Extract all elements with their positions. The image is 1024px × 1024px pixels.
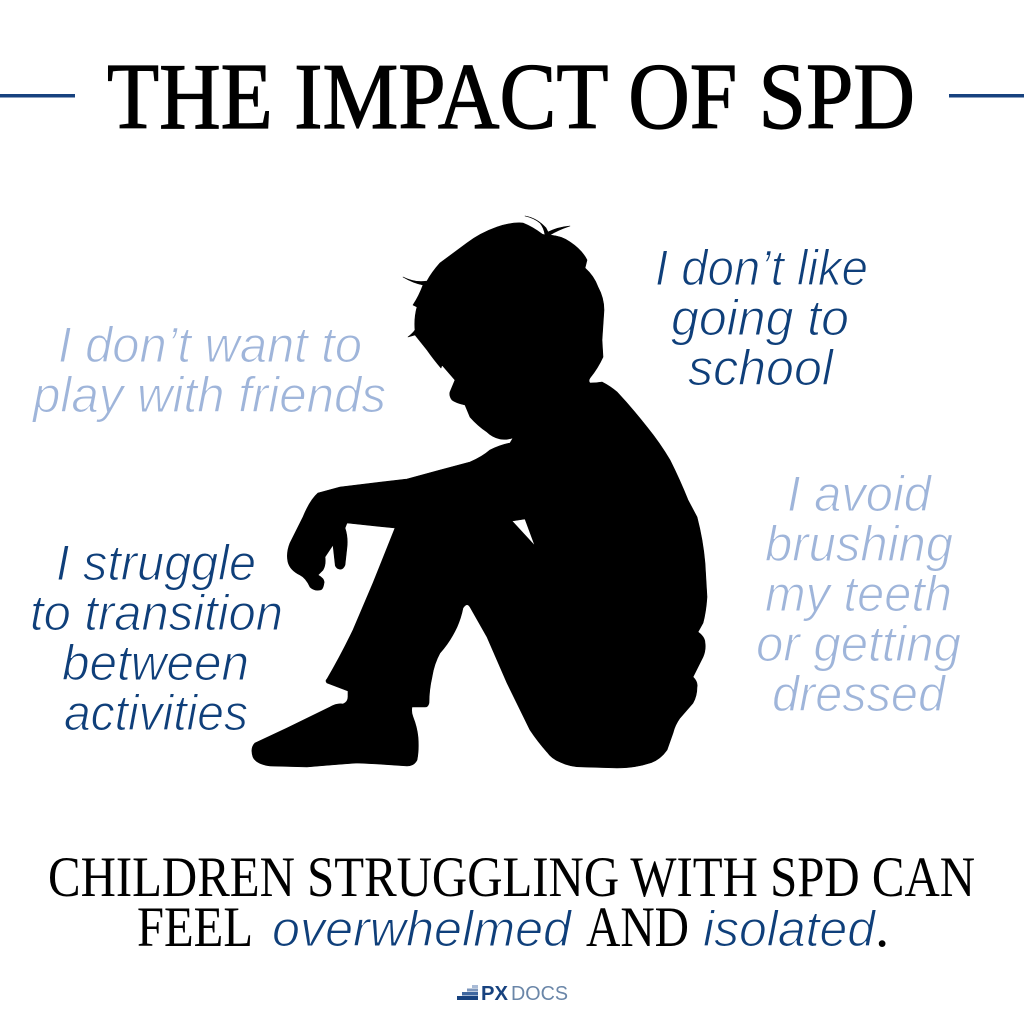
bottom statement: .: [875, 896, 889, 959]
quote: transitions: [30, 535, 283, 741]
quote: play with friends: play with friends: [31, 367, 386, 423]
quote: play with friends: I don’t want to: [58, 317, 362, 373]
title with side rules: THE IMPACT OF SPD: [107, 45, 915, 149]
quote: play with friends: [31, 317, 386, 423]
silhouette: child sitting with head down: [252, 216, 707, 768]
quote: brushing teeth or getting dressed: my teeth: [765, 566, 952, 622]
quote: transitions: I struggle: [56, 535, 256, 591]
quote: brushing teeth or getting dressed: I avoid: [787, 466, 933, 522]
bottom statement: overwhelmed: [272, 901, 573, 957]
logo: PX Docs: PX: [481, 983, 509, 1005]
bottom statement: FEEL: [137, 896, 253, 959]
quote: brushing teeth or getting dressed: brushing: [765, 516, 953, 572]
logo: PX Docs: [457, 983, 568, 1005]
quote: brushing teeth or getting dressed: dressed: [772, 666, 947, 722]
bottom statement: isolated: [703, 901, 877, 957]
bottom statement: [48, 846, 975, 959]
logo: PX Docs: DOCS: [511, 983, 568, 1005]
quote: transitions: between: [62, 635, 249, 691]
quote: going to school: going to: [671, 290, 849, 346]
bottom statement: AND: [586, 896, 689, 959]
quote: brushing teeth or getting dressed: or getting: [756, 616, 961, 672]
quote: going to school: I don’t like: [655, 240, 868, 296]
quote: going to school: [655, 240, 868, 396]
quote: going to school: school: [688, 340, 835, 396]
quote: transitions: to transition: [30, 585, 283, 641]
quote: transitions: activities: [64, 685, 248, 741]
quote: brushing teeth or getting dressed: [756, 466, 961, 722]
